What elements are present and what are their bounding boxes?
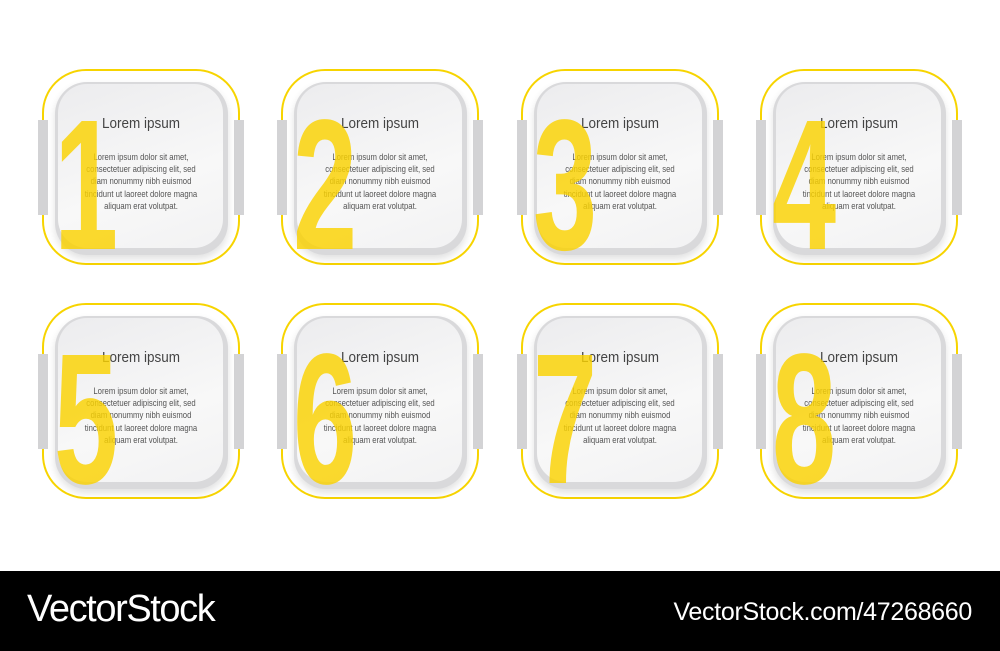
- card 7: [517, 303, 723, 523]
- body 3: Lorem ipsum dolor sit amet,: [572, 152, 668, 162]
- number 2: 2: [293, 82, 357, 289]
- body 5: diam nonummy nibh euismod: [91, 410, 191, 420]
- body 4: Lorem ipsum dolor sit amet,: [811, 152, 907, 162]
- body 3: diam nonummy nibh euismod: [570, 176, 670, 186]
- body 6: aliquam erat volutpat.: [343, 435, 417, 445]
- body 5: consectetuer adipiscing elit, sed: [86, 398, 196, 408]
- number 3: 3: [533, 82, 597, 289]
- body 2: aliquam erat volutpat.: [343, 201, 417, 211]
- title 4: Lorem ipsum: [820, 115, 898, 132]
- body 1: aliquam erat volutpat.: [104, 201, 178, 211]
- card 4: [756, 69, 962, 289]
- body 2: consectetuer adipiscing elit, sed: [325, 164, 435, 174]
- footer url: VectorStock.com/47268660: [673, 598, 972, 626]
- body 3: aliquam erat volutpat.: [583, 201, 657, 211]
- number 8: 8: [772, 316, 836, 523]
- title 8: Lorem ipsum: [820, 349, 898, 366]
- card 6: [277, 303, 483, 523]
- body 6: consectetuer adipiscing elit, sed: [325, 398, 435, 408]
- body 1: consectetuer adipiscing elit, sed: [86, 164, 196, 174]
- body 5: tincidunt ut laoreet dolore magna: [85, 423, 197, 433]
- body 8: consectetuer adipiscing elit, sed: [804, 398, 914, 408]
- body 8: diam nonummy nibh euismod: [809, 410, 909, 420]
- body 4: [802, 152, 916, 211]
- body 1: Lorem ipsum dolor sit amet,: [93, 152, 189, 162]
- body 8: Lorem ipsum dolor sit amet,: [811, 386, 907, 396]
- title 2: Lorem ipsum: [341, 115, 419, 132]
- body 2: tincidunt ut laoreet dolore magna: [324, 189, 436, 199]
- body 3: [564, 152, 676, 211]
- number 4: 4: [772, 82, 836, 289]
- footer logo: VectorStock: [27, 588, 214, 630]
- number 6: 6: [293, 316, 357, 523]
- card 1: [38, 69, 244, 289]
- number 7: 7: [533, 316, 597, 523]
- body 4: aliquam erat volutpat.: [822, 201, 896, 211]
- title 1: Lorem ipsum: [102, 115, 180, 132]
- body 4: consectetuer adipiscing elit, sed: [804, 164, 914, 174]
- body 1: diam nonummy nibh euismod: [91, 176, 191, 186]
- title 5: Lorem ipsum: [102, 349, 180, 366]
- body 7: [564, 386, 676, 445]
- card 2: [277, 69, 483, 289]
- body 3: consectetuer adipiscing elit, sed: [565, 164, 675, 174]
- card 3: [517, 69, 723, 289]
- body 3: tincidunt ut laoreet dolore magna: [564, 189, 676, 199]
- title 7: Lorem ipsum: [581, 349, 659, 366]
- body 6: Lorem ipsum dolor sit amet,: [332, 386, 428, 396]
- body 8: [802, 386, 916, 445]
- body 7: tincidunt ut laoreet dolore magna: [564, 423, 676, 433]
- body 6: tincidunt ut laoreet dolore magna: [324, 423, 436, 433]
- body 8: aliquam erat volutpat.: [822, 435, 896, 445]
- body 2: diam nonummy nibh euismod: [330, 176, 430, 186]
- body 7: aliquam erat volutpat.: [583, 435, 657, 445]
- card 8: [756, 303, 962, 523]
- body 6: [324, 386, 436, 445]
- body 6: diam nonummy nibh euismod: [330, 410, 430, 420]
- footer band: [0, 571, 1000, 651]
- number 5: 5: [54, 316, 118, 523]
- body 5: Lorem ipsum dolor sit amet,: [93, 386, 189, 396]
- body 1: [84, 152, 198, 211]
- body 4: tincidunt ut laoreet dolore magna: [803, 189, 915, 199]
- body 7: diam nonummy nibh euismod: [570, 410, 670, 420]
- body 7: consectetuer adipiscing elit, sed: [565, 398, 675, 408]
- body 5: aliquam erat volutpat.: [104, 435, 178, 445]
- title 3: Lorem ipsum: [581, 115, 659, 132]
- body 4: diam nonummy nibh euismod: [809, 176, 909, 186]
- body 1: tincidunt ut laoreet dolore magna: [85, 189, 197, 199]
- number 1: 1: [54, 82, 118, 289]
- card 5: [38, 303, 244, 523]
- body 7: Lorem ipsum dolor sit amet,: [572, 386, 668, 396]
- body 2: Lorem ipsum dolor sit amet,: [332, 152, 428, 162]
- body 2: [324, 152, 436, 211]
- body 5: [84, 386, 198, 445]
- body 8: tincidunt ut laoreet dolore magna: [803, 423, 915, 433]
- title 6: Lorem ipsum: [341, 349, 419, 366]
